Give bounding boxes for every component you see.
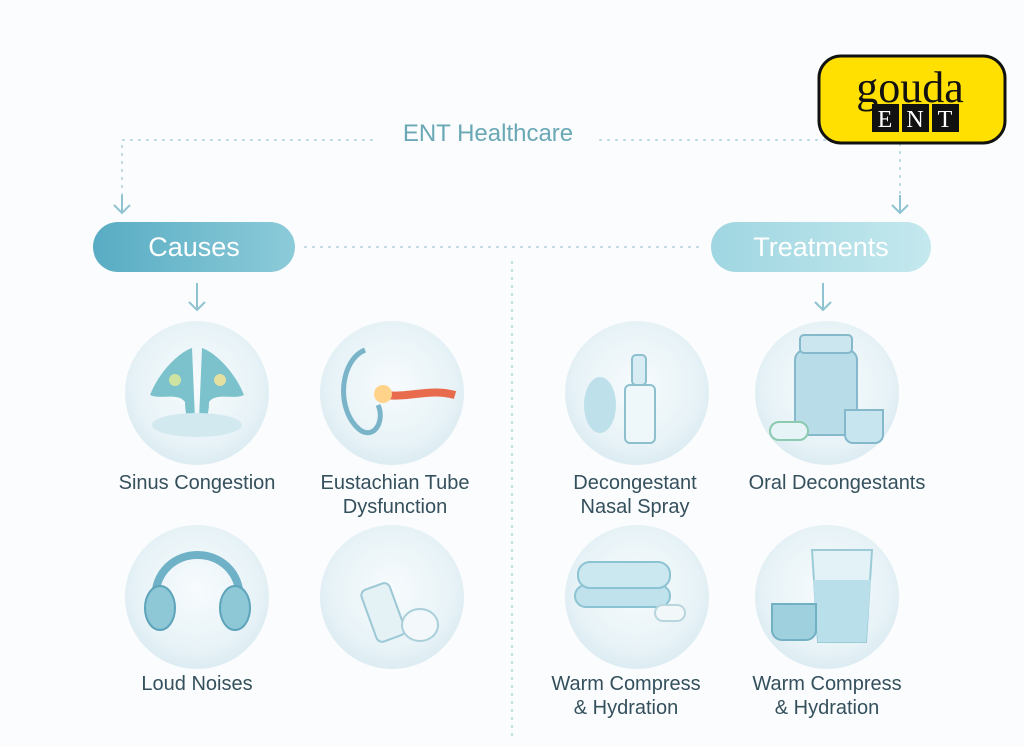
labels: Warm Compress — [752, 673, 902, 695]
icon: nasal spray — [565, 321, 709, 465]
logo — [819, 56, 1005, 143]
logo: E — [878, 107, 892, 133]
pill: treatments — [711, 222, 931, 272]
title: ENT Healthcare — [403, 120, 573, 147]
labels: Dysfunction — [343, 496, 447, 518]
labels: & Hydration — [775, 697, 879, 719]
icon: spray and pill — [320, 525, 464, 669]
connector lines — [122, 140, 900, 740]
labels: Nasal Spray — [581, 496, 689, 518]
icon: sinus — [125, 321, 269, 465]
pill: causes — [93, 222, 295, 272]
icon: ear — [320, 321, 464, 465]
logo: T — [938, 107, 953, 133]
labels: Oral Decongestants — [749, 472, 925, 494]
arrows — [114, 195, 908, 310]
labels: Loud Noises — [141, 673, 253, 695]
icon: headphones — [125, 525, 269, 669]
logo: gouda — [856, 63, 964, 112]
labels: Sinus Congestion — [119, 472, 275, 494]
logo: N — [906, 107, 924, 133]
pill: treatments: Treatments — [753, 232, 889, 262]
labels — [119, 472, 925, 719]
icon: towel — [565, 525, 709, 669]
icon: oral decongestants — [755, 321, 899, 465]
pill: causes: Causes — [148, 232, 240, 262]
labels: Decongestant — [573, 472, 697, 494]
labels: & Hydration — [574, 697, 678, 719]
icon: cup and glass — [755, 525, 899, 669]
labels: Eustachian Tube — [320, 472, 470, 494]
labels: Warm Compress — [551, 673, 701, 695]
